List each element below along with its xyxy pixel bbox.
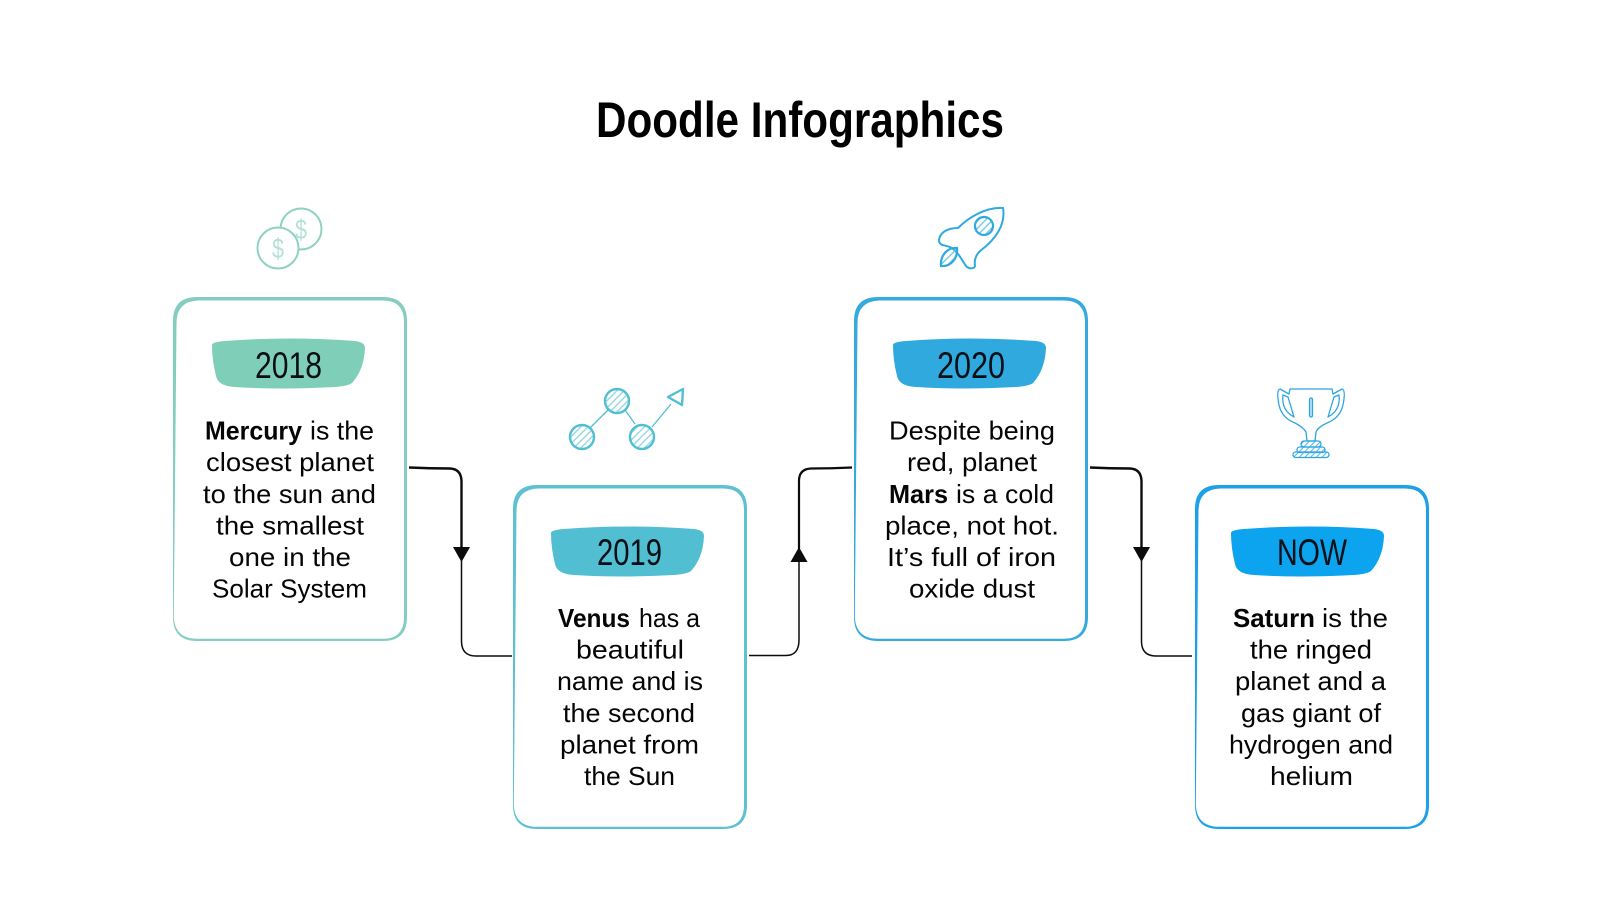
icon: rocket [939, 208, 1003, 268]
arrow: 2020 to now [1090, 468, 1192, 656]
description: red, planet [907, 447, 1038, 477]
arrow: 2018 to 2019 [409, 468, 512, 656]
description: It’s full of iron [887, 542, 1056, 572]
description: name and is [557, 666, 703, 696]
year badge: 2018 [255, 345, 322, 386]
description: beautiful [576, 635, 684, 665]
description: planet from [560, 729, 699, 759]
year badge: 2019 [597, 532, 662, 573]
description: oxide dust [909, 574, 1036, 604]
now badge: NOW [1277, 532, 1347, 573]
card outline [513, 485, 747, 829]
description: Mars [889, 479, 948, 509]
year badge [212, 338, 365, 388]
icon: trophy [1278, 389, 1344, 458]
description [203, 416, 376, 604]
description: the ringed [1250, 635, 1372, 665]
description [557, 603, 703, 791]
card outline [854, 297, 1088, 641]
icon: coins: $ [272, 233, 284, 264]
year badge [893, 338, 1046, 388]
description: Mercury [205, 416, 303, 446]
description: planet and a [1235, 666, 1387, 696]
year badge: 2020 [937, 345, 1005, 386]
arrow: 2019 to 2020 [749, 468, 852, 656]
year badge [551, 526, 704, 576]
description: helium [1270, 761, 1353, 791]
description: gas giant of [1241, 698, 1382, 728]
description: is the [1322, 603, 1388, 633]
description: the Sun [584, 761, 675, 791]
description: the second [563, 698, 695, 728]
icon: coins [258, 208, 322, 268]
description [1229, 603, 1393, 791]
description: Saturn [1233, 603, 1315, 633]
description: is the [310, 416, 374, 446]
panel: 2020 [854, 297, 1088, 641]
description: place, not hot. [885, 510, 1059, 540]
description: the smallest [216, 510, 365, 540]
description: hydrogen and [1229, 729, 1393, 759]
card outline [173, 297, 407, 641]
panel: 2019 [513, 485, 747, 829]
description: is a cold [956, 479, 1054, 509]
description: closest planet [206, 447, 375, 477]
description: Venus [558, 603, 630, 633]
description: to the sun and [203, 479, 376, 509]
card outline [1195, 485, 1429, 829]
title: Doodle Infographics [596, 92, 1004, 148]
description: one in the [229, 542, 351, 572]
description: Despite being [889, 416, 1055, 446]
icon: network graph with arrow [570, 389, 683, 449]
panel: 2018 [173, 297, 407, 641]
description: Solar System [212, 574, 367, 604]
description: has a [639, 603, 701, 633]
now badge [1231, 526, 1384, 576]
icon: coins: $ [295, 214, 307, 245]
description [885, 416, 1059, 604]
panel: now [1195, 485, 1429, 829]
